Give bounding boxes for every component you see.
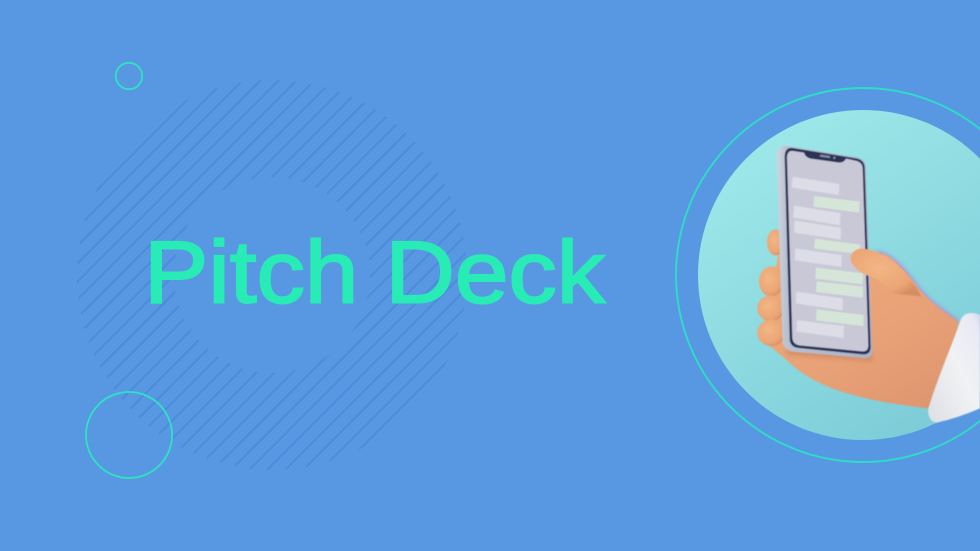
finger 3 xyxy=(757,319,785,346)
sleeve xyxy=(928,313,980,423)
small outlined circle xyxy=(116,63,142,89)
title: Pitch Deck xyxy=(144,222,606,322)
hand palm xyxy=(762,247,959,408)
sent bubbles xyxy=(813,196,864,326)
hand shadow glow xyxy=(877,251,959,327)
striped ring decoration xyxy=(77,80,466,470)
back finger xyxy=(766,228,780,256)
phone bezel xyxy=(785,148,871,354)
large outlined circle xyxy=(86,392,172,478)
phone shadow on palm xyxy=(786,350,873,362)
illustration: hand holding phone xyxy=(757,146,980,423)
received bubbles xyxy=(792,177,844,338)
outer ring around illustration xyxy=(676,88,980,462)
teal disc xyxy=(698,110,980,440)
speaker and camera xyxy=(820,156,835,158)
finger 1 xyxy=(759,266,784,296)
phone body xyxy=(777,146,872,358)
thumb xyxy=(851,249,922,297)
finger 2 xyxy=(757,295,784,321)
chat bubbles xyxy=(792,177,864,338)
phone screen xyxy=(787,151,868,351)
